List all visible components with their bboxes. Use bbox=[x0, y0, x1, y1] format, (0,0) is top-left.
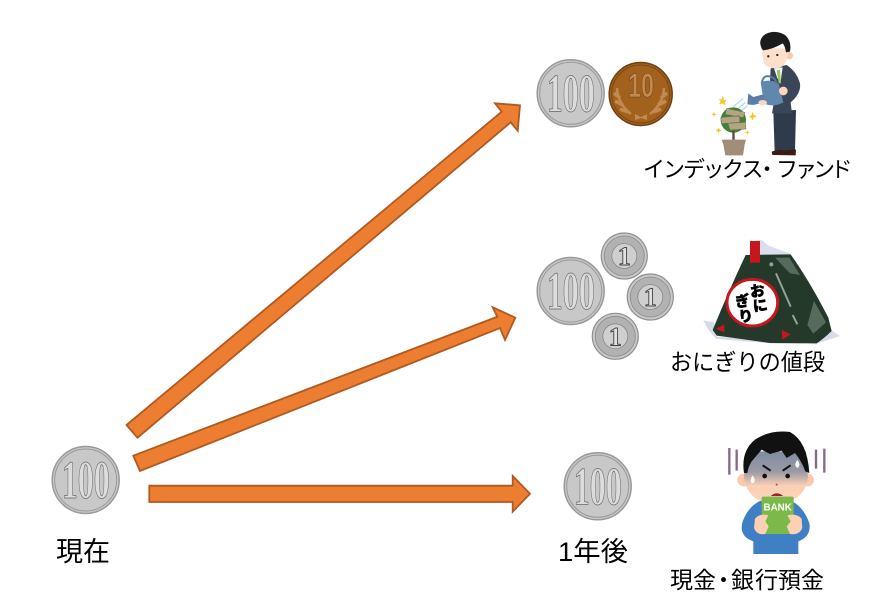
hands bbox=[754, 515, 802, 534]
coin: 1 yen right: 1 bbox=[644, 283, 657, 312]
coin: one year later 100 yen bbox=[564, 453, 631, 520]
round label bbox=[727, 279, 778, 326]
arrow: present to rice ball price bbox=[133, 307, 515, 471]
coin: 1 yen bottom bbox=[592, 313, 638, 359]
illustration: worried man with bankbook bbox=[729, 432, 824, 554]
body bbox=[742, 501, 810, 554]
hair bbox=[743, 432, 809, 473]
label text: お bbox=[749, 282, 766, 301]
highlights bbox=[775, 258, 826, 334]
face bbox=[744, 451, 808, 502]
coin: index fund 100 yen bbox=[537, 60, 604, 127]
hair bbox=[760, 32, 790, 52]
arrow: present to index fund bbox=[126, 103, 520, 438]
label text bbox=[733, 282, 770, 326]
trousers bbox=[773, 110, 796, 152]
sparkles bbox=[719, 96, 757, 120]
coin: present 100 yen bbox=[52, 446, 119, 514]
illustration: worried man with bankbook: BANK bbox=[763, 502, 793, 513]
label: one year later: 1年後 bbox=[558, 537, 628, 567]
shirt and tie bbox=[774, 67, 783, 82]
red strip bbox=[750, 241, 760, 263]
label: index fund: インデックス・ファンド bbox=[643, 157, 853, 182]
coin: present 100 yen: 100 bbox=[62, 450, 110, 510]
label: cash and bank deposits: 現金・銀行預金 bbox=[670, 567, 824, 593]
coin: one year later 100 yen: 100 bbox=[574, 456, 622, 516]
coin: rice ball 100 yen: 100 bbox=[547, 261, 595, 321]
wrapper bbox=[703, 320, 840, 344]
trunk and pot bbox=[732, 131, 735, 141]
mouth bbox=[771, 493, 783, 496]
shoes bbox=[772, 150, 796, 155]
jacket bbox=[770, 65, 800, 113]
coin: 1 yen bottom: 1 bbox=[609, 322, 622, 351]
coin: 1 yen top bbox=[601, 233, 647, 279]
nori bbox=[713, 254, 832, 343]
coin: 10 yen: 10 bbox=[628, 67, 654, 105]
label text: に bbox=[752, 297, 769, 316]
eyes and brows bbox=[763, 465, 791, 471]
label: present: 現在 bbox=[56, 537, 110, 567]
water bbox=[733, 98, 747, 111]
money tree foliage bbox=[721, 107, 746, 133]
coin: 1 yen right bbox=[627, 274, 673, 320]
coin: 10 yen bbox=[609, 62, 672, 126]
sweat bbox=[751, 460, 799, 483]
coin: index fund 100 yen: 100 bbox=[547, 64, 595, 124]
illustration: rice ball bbox=[703, 240, 840, 344]
coin: rice ball 100 yen bbox=[537, 258, 604, 324]
label text: ぎ bbox=[734, 291, 751, 311]
worry lines bbox=[729, 448, 824, 475]
bankbook bbox=[762, 497, 794, 534]
ear and face bbox=[786, 52, 793, 59]
watering can bbox=[761, 81, 783, 105]
coin: 1 yen top: 1 bbox=[618, 242, 631, 271]
label: rice ball price: おにぎりの値段 bbox=[670, 349, 825, 375]
arrow: present to one year later bbox=[149, 476, 530, 512]
red triangles bbox=[716, 324, 791, 340]
illustration: man watering money tree bbox=[711, 32, 800, 155]
ears bbox=[737, 474, 751, 486]
label text: り bbox=[737, 307, 754, 326]
